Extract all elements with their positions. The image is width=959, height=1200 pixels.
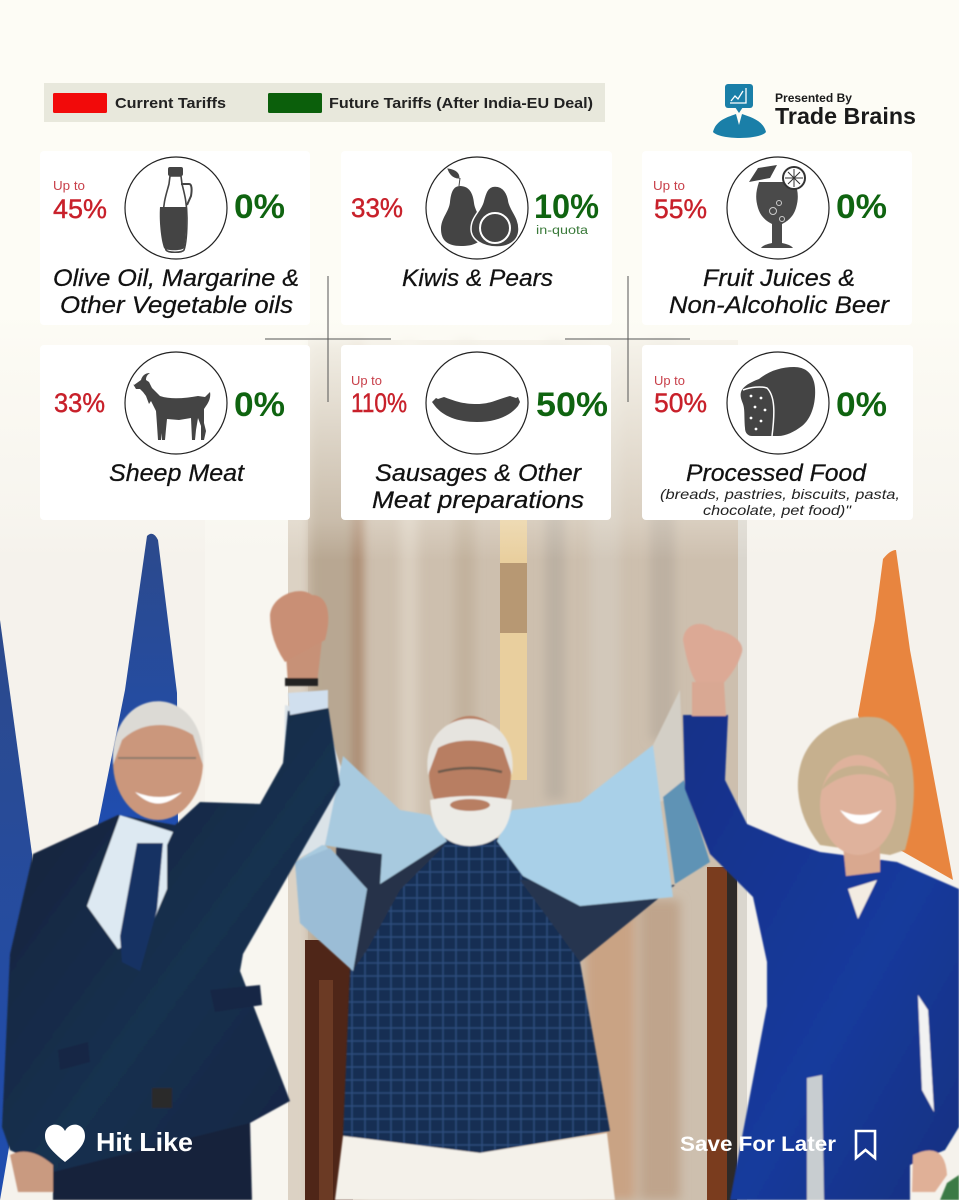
person: left man [2,591,340,1200]
panel: sausages: 50% [536,386,608,424]
panel: processed food: 0% [836,386,887,424]
shirt [848,880,877,919]
logo: Trade Brains: Presented By [775,93,853,105]
dhoti [335,1133,615,1200]
panel: olive oil: Other Vegetable oils [60,292,293,319]
panel: kiwis and pears: in-quota [536,225,589,237]
call to action: hit like [45,1125,193,1162]
panel: fruit juices [642,151,912,325]
panel: olive oil [40,151,310,325]
dark sleeve right [520,880,675,962]
panel: sausages: Up to [351,373,382,388]
logo: Trade Brains: Trade Brains [775,103,916,129]
panel: sheep meat: 33% [54,388,105,418]
EU flag far left [0,620,32,1200]
panel: processed food: Processed Food [686,460,867,487]
panel: fruit juices: 0% [836,188,887,226]
head [429,716,511,828]
icon: oil bottle [160,167,192,252]
pale sleeve [284,705,342,860]
panel: fruit juices: Non-Alcoholic Beer [669,292,890,319]
EU flag left [97,534,178,830]
panel: processed food: (breads, pastries, biscuits, pasta, [660,486,900,502]
India flag [858,550,953,880]
belt [152,1088,172,1108]
tie [120,843,163,971]
panel: kiwis and pears: 10% [534,188,599,226]
call to action: hit like: Hit Like [96,1127,193,1157]
shawl right [497,745,673,906]
panel: olive oil: Olive Oil, Margarine & [53,265,299,292]
pocket [210,985,262,1012]
panel: sheep meat: 0% [234,386,285,424]
shirt [87,815,173,949]
panel: fruit juices: Up to [653,178,685,193]
person: centre man [284,690,710,1200]
icon: sausage [432,396,520,422]
panel: processed food: Up to [654,373,685,388]
dark sleeve left [336,800,445,970]
panel: fruit juices: 55% [654,194,707,224]
vest [343,838,610,1153]
panel: kiwis and pears [341,151,612,325]
panel: processed food: 50% [654,388,707,418]
icon: bread [741,367,815,436]
panel: olive oil: 45% [53,194,107,224]
panel: processed food [642,345,913,520]
face [113,704,203,820]
panel: sheep meat: Sheep Meat [109,460,245,487]
panel: olive oil: 0% [234,188,285,226]
panel: fruit juices: Fruit Juices & [703,265,855,292]
panel: sausages [341,345,611,520]
panel: olive oil: Up to [53,178,85,193]
icon: goat [133,373,210,440]
panel: processed food: chocolate, pet food)" [703,502,852,518]
gap [918,995,934,1112]
logo: Trade Brains [713,84,916,138]
sleeve right [653,690,684,802]
hair and face [798,717,914,855]
panel: sausages: Sausages & Other [375,460,582,487]
panel: sheep meat [40,345,310,520]
panel: kiwis and pears: 33% [351,193,403,223]
icon: pears [441,169,519,247]
legend: Current Tariffs [115,95,226,112]
panel: kiwis and pears: Kiwis & Pears [402,265,553,292]
icon: cocktail glass [749,165,805,248]
call to action: save for later: Save For Later [680,1133,836,1156]
hand raised [285,640,322,684]
hands [683,624,742,692]
shawl left [295,756,447,971]
legend [44,83,605,122]
legend: Future Tariffs (After India-EU Deal) [329,95,593,112]
panel: sausages: 110% [351,388,407,418]
call to action: save for later [680,1131,875,1158]
panel: sausages: Meat preparations [372,487,584,514]
person: right woman [683,624,959,1200]
hand lower [10,1152,53,1192]
